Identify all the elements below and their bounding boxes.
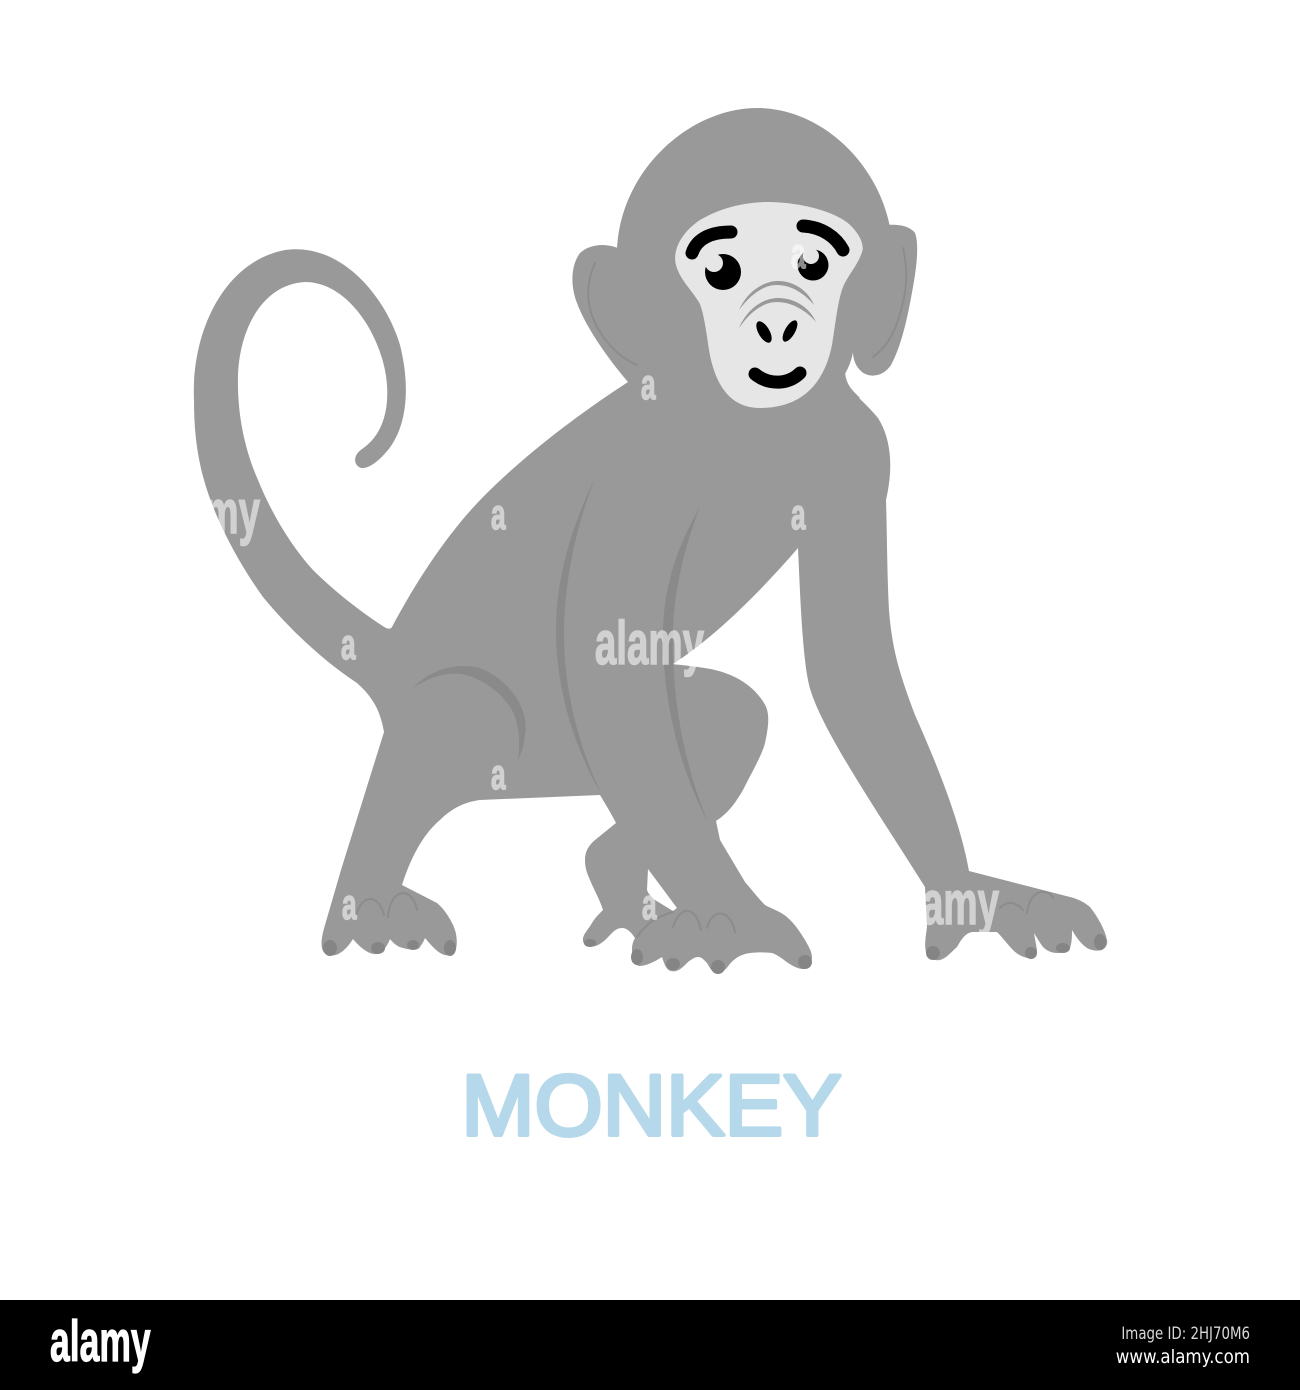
mouth	[755, 373, 800, 382]
back foot gap	[647, 869, 677, 911]
head	[617, 108, 892, 422]
title: MONKEY	[461, 1058, 842, 1154]
website: www.alamy.com	[1116, 1346, 1250, 1368]
body and limbs	[322, 382, 1107, 973]
watermarks: alamy	[151, 478, 260, 546]
watermarks	[151, 231, 999, 937]
watermarks: a	[641, 362, 656, 409]
watermarks: a	[491, 752, 506, 799]
right ear	[853, 225, 917, 376]
tail	[194, 249, 420, 732]
nails	[323, 934, 1106, 974]
footer bar	[0, 1300, 1300, 1390]
watermarks: a	[791, 492, 806, 539]
watermarks: a	[341, 622, 356, 669]
watermarks: alamy	[595, 609, 704, 677]
watermarks: a	[342, 882, 357, 929]
face	[675, 202, 863, 408]
illustration: monkey	[194, 108, 1107, 974]
watermarks: a	[491, 492, 506, 539]
body creases	[413, 478, 708, 822]
nose creases	[739, 281, 814, 310]
watermarks: alamy	[890, 869, 999, 937]
face mask	[675, 202, 863, 408]
watermarks: a	[791, 231, 806, 278]
image id: Image ID: 2HJ70M6	[1121, 1323, 1250, 1343]
eyebrows	[692, 226, 843, 253]
left ear	[572, 245, 700, 400]
watermarks: a	[642, 882, 657, 929]
footer logo: alamy	[50, 1310, 151, 1374]
neck patch	[790, 340, 860, 420]
nostrils	[753, 319, 775, 345]
eyes	[705, 254, 741, 290]
fine creases	[357, 248, 1053, 937]
